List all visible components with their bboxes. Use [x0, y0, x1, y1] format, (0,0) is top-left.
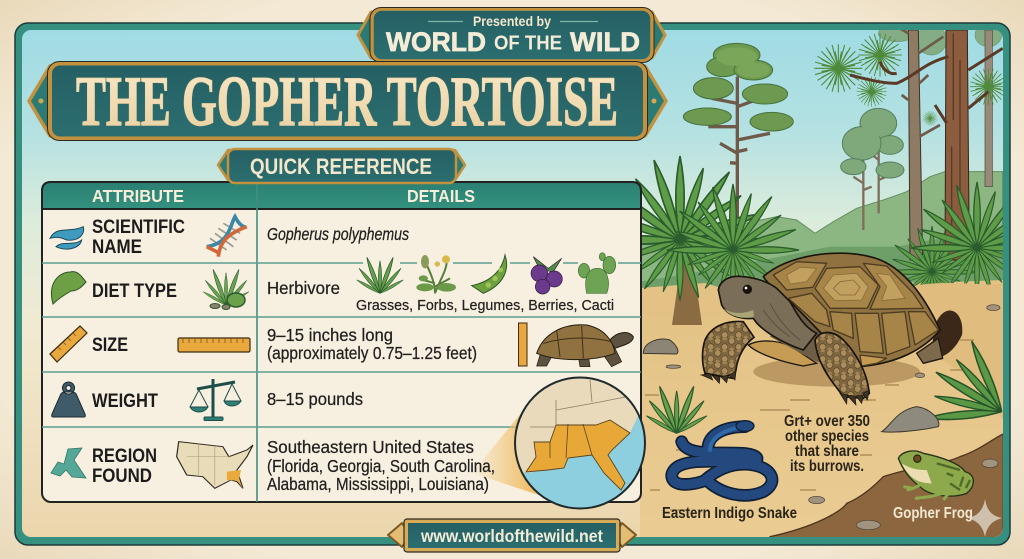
row: size: (approximately 0.75–1.25 feet)	[267, 343, 477, 363]
row: diet type: DIET TYPE	[92, 281, 177, 302]
icon: DNA	[207, 217, 247, 257]
banner: presented by: WORLD	[386, 27, 486, 57]
distant pines	[841, 108, 904, 230]
snake outline	[672, 427, 772, 495]
icon: leaf	[51, 272, 86, 304]
banner: website footer	[388, 519, 636, 552]
banner: presented by: OF THE	[494, 32, 562, 54]
illustration: gopher tortoise	[702, 253, 943, 405]
row: scientific name	[92, 217, 409, 258]
text: burrow note: its burrows.	[790, 458, 864, 475]
panel: quick reference table	[42, 182, 650, 515]
carapace	[763, 253, 940, 367]
map callout cone	[472, 412, 575, 498]
ornament ends	[29, 66, 666, 136]
label: Gopher Frog: Gopher Frog	[893, 505, 973, 522]
icon: plant	[202, 269, 250, 310]
label: Eastern Indigo Snake: Eastern Indigo Snake	[662, 505, 797, 522]
shrub backdrop	[642, 171, 1003, 282]
ocean	[510, 375, 650, 515]
icon: cacti	[578, 253, 616, 293]
icon: sparkle	[968, 499, 1002, 537]
snake body	[672, 427, 772, 495]
grass tuft left	[645, 385, 708, 435]
claws right	[840, 390, 869, 405]
text: burrow note: Grt+ over 350	[784, 413, 870, 430]
row: diet type: Herbivore	[267, 278, 340, 298]
illustration: pine forest	[630, 23, 1007, 297]
palmetto right	[934, 340, 1002, 420]
burrow entrance	[932, 310, 962, 356]
table header	[42, 182, 641, 209]
row: scientific name: NAME	[92, 237, 142, 258]
row: size	[92, 325, 477, 363]
icon: forbs	[416, 255, 456, 293]
row: region found: REGION	[92, 446, 157, 467]
table body	[42, 182, 641, 502]
icon: region blob	[51, 448, 86, 478]
sand marks	[645, 340, 974, 510]
front-right leg	[815, 332, 869, 398]
row: weight	[92, 389, 363, 412]
row: size: SIZE	[92, 335, 128, 356]
table header: ATTRIBUTE	[92, 186, 184, 206]
row: diet type: Grasses, Forbs, Legumes, Berries, Cacti	[356, 298, 614, 314]
claws	[702, 372, 736, 383]
icon: US map	[177, 442, 253, 488]
icon: ruler horizontal	[178, 338, 250, 352]
title: THE GOPHER TORTOISE	[76, 63, 618, 141]
row: region found: (Florida, Georgia, South Carolina,	[267, 456, 495, 476]
tree: large brown trunk	[945, 30, 969, 260]
icon: weight	[52, 382, 85, 417]
illustration: lower plants and rocks	[643, 305, 1006, 538]
rock middle	[882, 407, 939, 432]
row: weight: 8–15 pounds	[267, 389, 363, 409]
far pine foliage	[878, 30, 1002, 56]
branches with needle clusters	[814, 33, 1007, 126]
table header: DETAILS	[407, 186, 475, 206]
burrow mound	[914, 282, 1003, 420]
icon: grasses	[356, 257, 404, 294]
text: burrow note: that share	[795, 443, 859, 460]
banner: quick reference: QUICK REFERENCE	[250, 154, 432, 179]
map border	[515, 378, 645, 508]
banner: title	[29, 62, 666, 141]
row: region found: Southeastern United States	[267, 437, 474, 457]
rock left	[643, 339, 678, 354]
banner: website footer: www.worldofthewild.net	[420, 526, 603, 546]
illustration: gopher frog	[898, 451, 973, 500]
banner: presented by	[358, 8, 665, 62]
illustration: palmettos	[634, 156, 1003, 325]
ground: sand	[640, 280, 1003, 537]
row: region found: Alabama, Mississippi, Louisiana)	[267, 474, 489, 494]
row: scientific name: Gopherus polyphemus	[267, 224, 409, 244]
head and neck	[718, 276, 817, 350]
front-left leg	[702, 321, 754, 378]
land	[510, 375, 640, 473]
icon: small tortoise	[537, 325, 633, 367]
text: burrow note	[784, 415, 870, 471]
illustration: eastern indigo snake	[672, 421, 772, 495]
food icons	[356, 253, 616, 294]
banner: presented by: Presented by	[473, 13, 551, 29]
icon: berries	[531, 257, 562, 294]
row: diet type	[92, 278, 614, 314]
longleaf pine: centre tree	[683, 43, 793, 220]
icon: legumes	[472, 255, 507, 293]
banner plate	[50, 64, 645, 138]
icon: scales	[190, 379, 241, 420]
row: scientific name: SCIENTIFIC	[92, 217, 185, 238]
row: region found	[92, 437, 495, 494]
banner: quick reference	[218, 149, 465, 183]
ground shadow	[753, 357, 920, 387]
row: region found: FOUND	[92, 466, 152, 487]
icon: ruler diagonal	[50, 326, 87, 362]
body underside	[770, 306, 820, 362]
side diamonds	[358, 12, 665, 58]
dirt bank	[770, 434, 1003, 538]
plastron	[748, 341, 817, 366]
row: weight: WEIGHT	[92, 391, 158, 412]
banner: presented by: WILD	[570, 27, 640, 57]
highlighted states	[526, 420, 630, 490]
map inset	[510, 375, 650, 515]
row: size: 9–15 inches long	[267, 325, 393, 345]
text: burrow note: other species	[785, 428, 869, 445]
grey pine trunks	[908, 30, 923, 260]
pebbles	[666, 305, 1000, 530]
icon: ruler vertical	[518, 323, 527, 366]
icon: waves	[50, 227, 84, 249]
rear leg	[917, 338, 943, 363]
